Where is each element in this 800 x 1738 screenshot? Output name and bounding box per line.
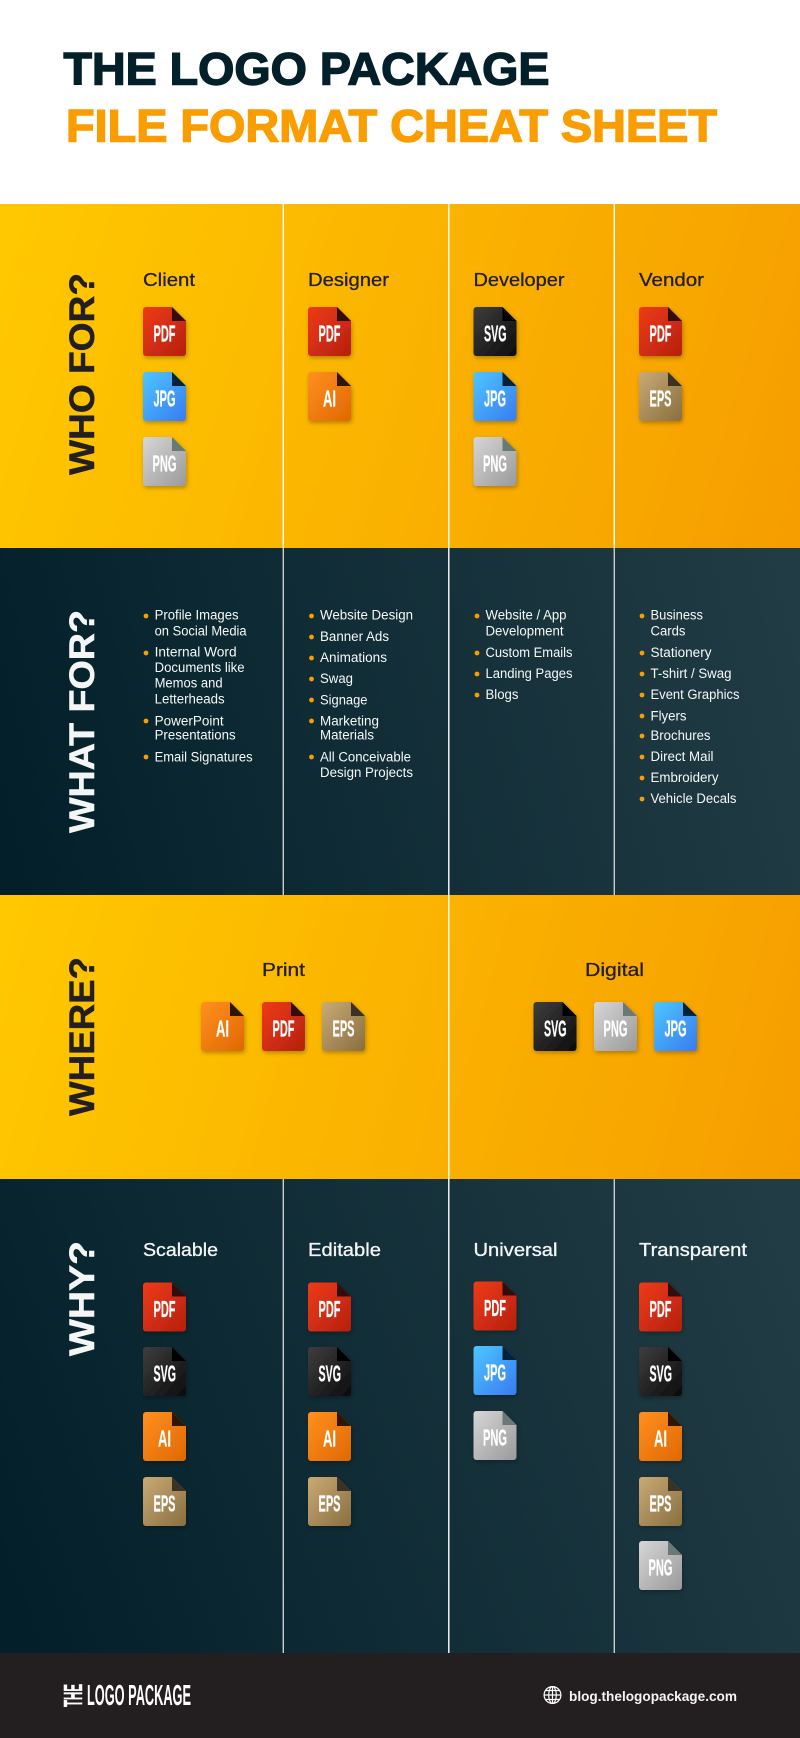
icon: svg (474, 307, 516, 356)
heading: where: WHERE? (62, 957, 102, 1116)
list: designer uses (309, 608, 413, 780)
group: print: Print (262, 960, 305, 980)
icon: jpg: JPG (154, 386, 176, 412)
icon: svg (143, 1347, 186, 1396)
list: designer uses: Website Design (320, 608, 413, 623)
icon: svg (639, 1347, 682, 1396)
list: designer uses: Marketing (320, 714, 379, 729)
icon: eps (322, 1002, 365, 1051)
icon: png: PNG (152, 450, 176, 476)
list: vendor uses: Business (650, 608, 703, 623)
column: designer (308, 270, 389, 421)
icon: pdf (308, 307, 351, 356)
icon: eps: EPS (650, 1490, 672, 1516)
list: developer uses (475, 608, 573, 702)
list: client uses: Letterheads (155, 692, 225, 707)
list: client uses: on Social Media (155, 624, 247, 639)
footer: LOGO PACKAGE (87, 1680, 191, 1712)
column: scalable (143, 1240, 218, 1526)
icon: ai: AI (158, 1426, 171, 1452)
icon: ai (639, 1412, 682, 1461)
heading: who for: WHO FOR? (62, 273, 102, 475)
panel: where (0, 895, 800, 1179)
icon: svg: SVG (544, 1016, 566, 1042)
icon: eps: EPS (650, 386, 672, 412)
logo wordmark (58, 1680, 191, 1712)
icon: pdf (639, 1282, 682, 1332)
list: vendor uses: Embroidery (650, 770, 719, 785)
list: client uses: Documents like (155, 660, 245, 675)
list: designer uses: All Conceivable (320, 750, 411, 765)
icon: pdf (143, 1282, 186, 1332)
icon: eps: EPS (318, 1490, 340, 1516)
panel: who for (0, 204, 800, 548)
list: vendor uses: Cards (650, 624, 686, 639)
icon: svg: SVG (154, 1360, 176, 1386)
icon: jpg: JPG (484, 386, 506, 412)
icon: eps (639, 1477, 682, 1526)
icon: ai: AI (216, 1016, 229, 1042)
icon: png (639, 1541, 682, 1590)
panel: why (0, 1179, 800, 1653)
group: print (201, 960, 365, 1051)
icon: pdf (143, 307, 186, 356)
icon: pdf: PDF (318, 320, 340, 346)
icon: pdf: PDF (272, 1016, 294, 1042)
icon: png (594, 1002, 637, 1051)
icon: png (474, 1411, 516, 1460)
icon: png: PNG (648, 1554, 672, 1580)
list: developer uses: Custom Emails (486, 645, 573, 660)
icon: svg (534, 1002, 576, 1051)
column: editable (308, 1240, 381, 1526)
icon: png: PNG (483, 450, 507, 476)
group: digital (534, 960, 697, 1051)
column: developer (474, 270, 565, 486)
icon: ai (143, 1412, 186, 1461)
list: designer uses: Signage (320, 693, 368, 708)
column: client: Client (143, 270, 195, 290)
logo wordmark: THE (58, 1684, 88, 1707)
icon: pdf: PDF (318, 1296, 340, 1322)
column: transparent (639, 1240, 747, 1590)
column: universal (474, 1240, 558, 1460)
icon: svg: SVG (650, 1360, 672, 1386)
icon: eps: EPS (154, 1490, 176, 1516)
icon: pdf: PDF (484, 1295, 506, 1321)
icon: png (474, 437, 516, 486)
icon: png: PNG (604, 1016, 628, 1042)
icon: jpg (474, 1346, 516, 1395)
panel: what for (0, 548, 800, 895)
list: developer uses: Development (486, 624, 564, 639)
column: designer: Designer (308, 270, 389, 290)
column: universal: Universal (474, 1240, 558, 1260)
icon: pdf (639, 307, 682, 356)
list: client uses (144, 608, 253, 765)
list: designer uses: Animations (320, 650, 387, 665)
icon: eps (639, 372, 682, 421)
website url: blog.thelogopackage.com (569, 1689, 737, 1704)
column: client (143, 270, 195, 486)
icon: pdf: PDF (650, 1296, 672, 1322)
list: developer uses: Blogs (486, 687, 519, 702)
list: vendor uses: Event Graphics (650, 687, 740, 702)
heading: why: WHY? (62, 1241, 102, 1356)
icon: png (143, 437, 186, 486)
icon: ai (308, 1412, 351, 1461)
list: client uses: PowerPoint (155, 714, 224, 729)
icon: svg (308, 1347, 351, 1396)
list: vendor uses (640, 608, 740, 806)
column: transparent: Transparent (639, 1240, 747, 1260)
title: THE LOGO PACKAGE (64, 43, 550, 94)
list: vendor uses: T-shirt / Swag (650, 666, 732, 681)
icon: eps (143, 1477, 186, 1526)
column: editable: Editable (308, 1240, 381, 1260)
icon: ai: AI (654, 1426, 667, 1452)
icon: ai: AI (323, 386, 336, 412)
icon: png: PNG (483, 1424, 507, 1450)
list: vendor uses: Stationery (650, 645, 712, 660)
icon: eps (308, 1477, 351, 1526)
title (64, 43, 717, 152)
icon: pdf (308, 1282, 351, 1332)
icon: pdf: PDF (154, 1296, 176, 1322)
list: client uses: Memos and (155, 676, 223, 691)
icon: pdf (474, 1282, 516, 1330)
list: developer uses: Website / App (486, 608, 566, 623)
list: client uses: Presentations (155, 728, 236, 743)
column: developer: Developer (474, 270, 565, 290)
icon: jpg: JPG (484, 1360, 506, 1386)
list: vendor uses: Flyers (650, 709, 687, 724)
list: designer uses: Banner Ads (320, 629, 389, 644)
list: designer uses: Swag (320, 671, 353, 686)
icon: jpg (474, 372, 516, 421)
icon: globe (544, 1687, 561, 1703)
list: vendor uses: Vehicle Decals (650, 791, 737, 806)
icon: ai: AI (323, 1426, 336, 1452)
list: vendor uses: Brochures (650, 728, 711, 743)
list: client uses: Internal Word (155, 645, 237, 660)
list: developer uses: Landing Pages (486, 666, 573, 681)
heading: what for: WHAT FOR? (62, 610, 102, 833)
icon: jpg (654, 1002, 697, 1051)
icon: eps: EPS (332, 1016, 354, 1042)
list: vendor uses: Direct Mail (650, 749, 714, 764)
column: vendor (639, 270, 704, 421)
list: designer uses: Materials (320, 728, 374, 743)
icon: pdf: PDF (650, 320, 672, 346)
title: FILE FORMAT CHEAT SHEET (66, 101, 717, 152)
icon: svg: SVG (484, 320, 506, 346)
icon: jpg: JPG (664, 1016, 686, 1042)
icon: jpg (143, 372, 186, 421)
icon: ai (201, 1002, 244, 1051)
list: client uses: Profile Images (155, 608, 239, 623)
footer (0, 1653, 800, 1738)
icon: pdf: PDF (154, 320, 176, 346)
column: vendor: Vendor (639, 270, 704, 290)
icon: ai (308, 372, 351, 421)
list: designer uses: Design Projects (320, 765, 413, 780)
group: digital: Digital (585, 960, 644, 980)
icon: svg: SVG (318, 1360, 341, 1386)
icon: pdf (262, 1002, 305, 1051)
column: scalable: Scalable (143, 1240, 218, 1260)
list: client uses: Email Signatures (155, 750, 253, 765)
